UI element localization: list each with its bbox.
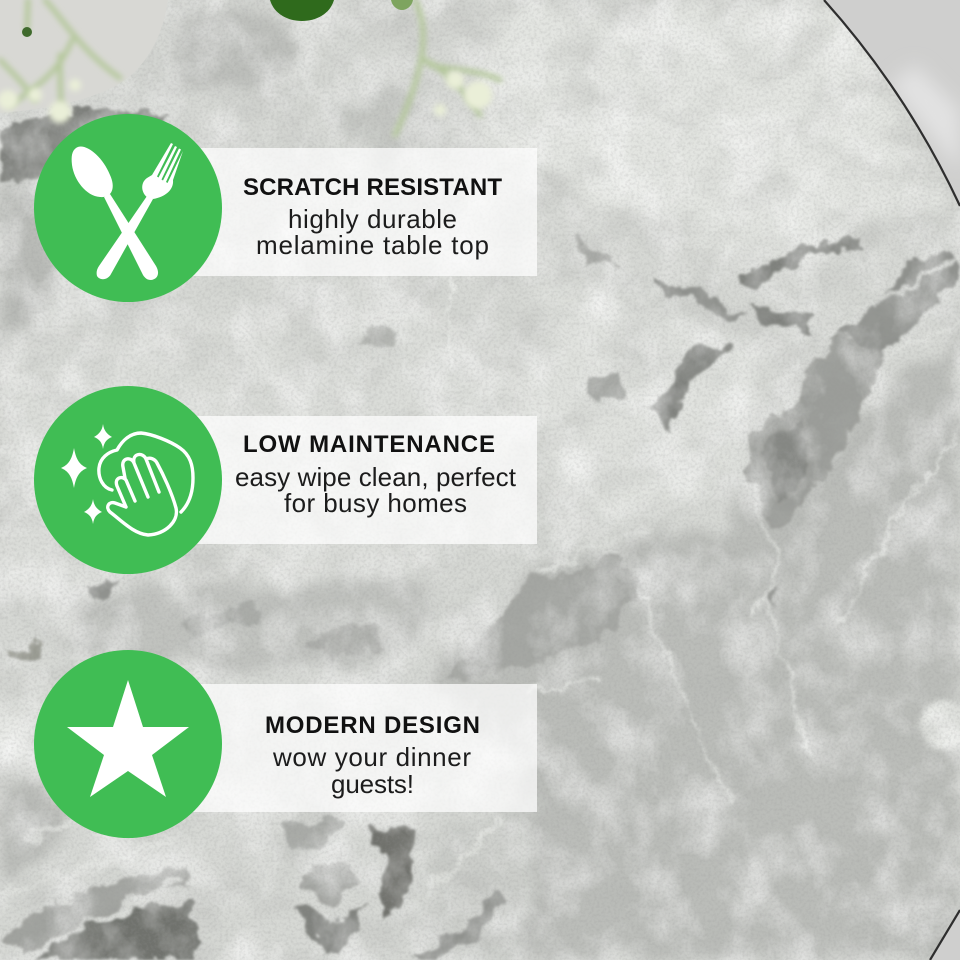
- text: description: easy wipe clean, perfect: [235, 462, 517, 492]
- text band: [190, 416, 537, 544]
- panel: modern design: [34, 650, 537, 838]
- heading: modern design: MODERN DESIGN: [265, 712, 480, 739]
- badge: green circle: [34, 650, 222, 838]
- text band: [190, 148, 537, 276]
- text: description: [273, 747, 471, 798]
- text: description: melamine table top: [256, 230, 489, 260]
- icon: star: [67, 680, 189, 797]
- heading: low maintenance: LOW MAINTENANCE: [243, 431, 495, 458]
- pale veins: [0, 255, 960, 920]
- icon: hand wiping with sparkles: [61, 424, 193, 535]
- heading: scratch resistant: SCRATCH RESISTANT: [243, 174, 502, 201]
- badge: green circle: [34, 386, 222, 574]
- panel: low maintenance: [34, 386, 537, 574]
- text: description: [258, 209, 488, 260]
- text: description: [236, 467, 516, 518]
- text: description: guests!: [331, 769, 414, 799]
- text: description: for busy homes: [284, 488, 467, 518]
- photo: white plant pot and greenery: [0, 0, 500, 135]
- badge: green circle: [34, 114, 222, 302]
- text band: [190, 684, 537, 812]
- text: description: highly durable: [288, 204, 457, 234]
- panel: scratch resistant: [34, 114, 537, 302]
- icon: crossed spoon and fork: [72, 143, 183, 280]
- text: description: wow your dinner: [272, 742, 471, 772]
